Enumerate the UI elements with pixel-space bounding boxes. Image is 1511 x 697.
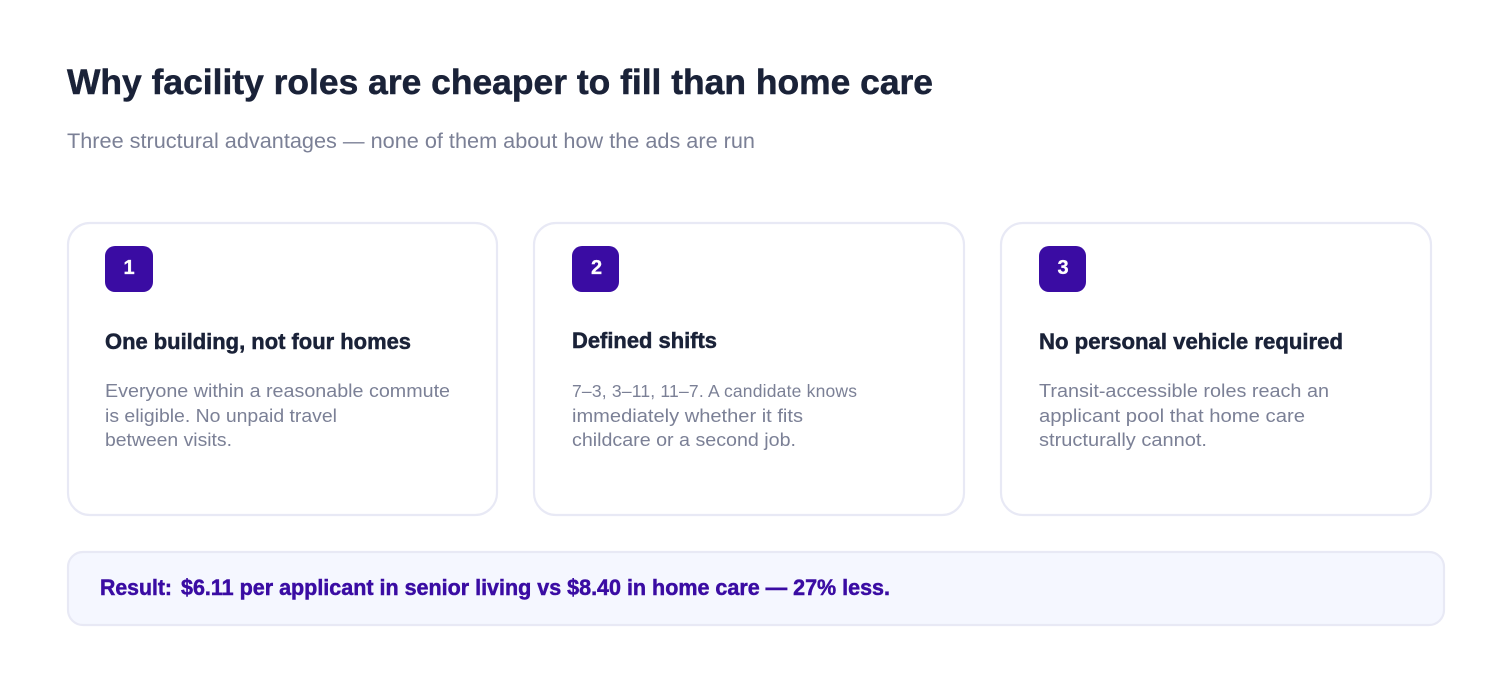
card 2 body: immediately whether it fits	[572, 405, 803, 426]
card 3 body	[1039, 380, 1329, 450]
card 3 body: Transit-accessible roles reach an	[1039, 380, 1329, 401]
result text: Result:	[100, 575, 172, 600]
card 3 body: structurally cannot.	[1039, 429, 1207, 450]
result text: $6.11 per applicant in senior living vs $8.40 in home care — 27% less.	[181, 575, 890, 600]
card 3 heading: No personal vehicle required	[1039, 329, 1343, 354]
card 1 body: Everyone within a reasonable commute	[105, 380, 450, 401]
card 1 body	[105, 380, 450, 450]
card 1 heading: One building, not four homes	[105, 329, 411, 354]
card 2 body: 7–3, 3–11, 11–7. A candidate knows	[572, 381, 857, 401]
panel: card 2	[534, 223, 964, 515]
title: Why facility roles are cheaper to fill than home care	[67, 63, 933, 102]
panel: card 1	[68, 223, 497, 515]
icon: number badge 1: 1	[123, 257, 135, 279]
icon: number badge 2: 2	[591, 257, 602, 279]
card 1 body: between visits.	[105, 429, 232, 450]
icon: number badge 3: 3	[1057, 257, 1069, 279]
card 2 heading: Defined shifts	[572, 328, 717, 353]
icon: number badge 3	[1039, 246, 1086, 292]
card 2 body	[572, 381, 857, 450]
card 3 body: applicant pool that home care	[1039, 405, 1305, 426]
icon: number badge 1	[105, 246, 153, 292]
panel: card 3	[1001, 223, 1431, 515]
card 1 body: is eligible. No unpaid travel	[105, 405, 337, 426]
icon: number badge 2	[572, 246, 619, 292]
callout: result banner	[68, 552, 1444, 625]
card 2 body: childcare or a second job.	[572, 429, 796, 450]
subtitle: Three structural advantages — none of them about how the ads are run	[67, 130, 755, 153]
